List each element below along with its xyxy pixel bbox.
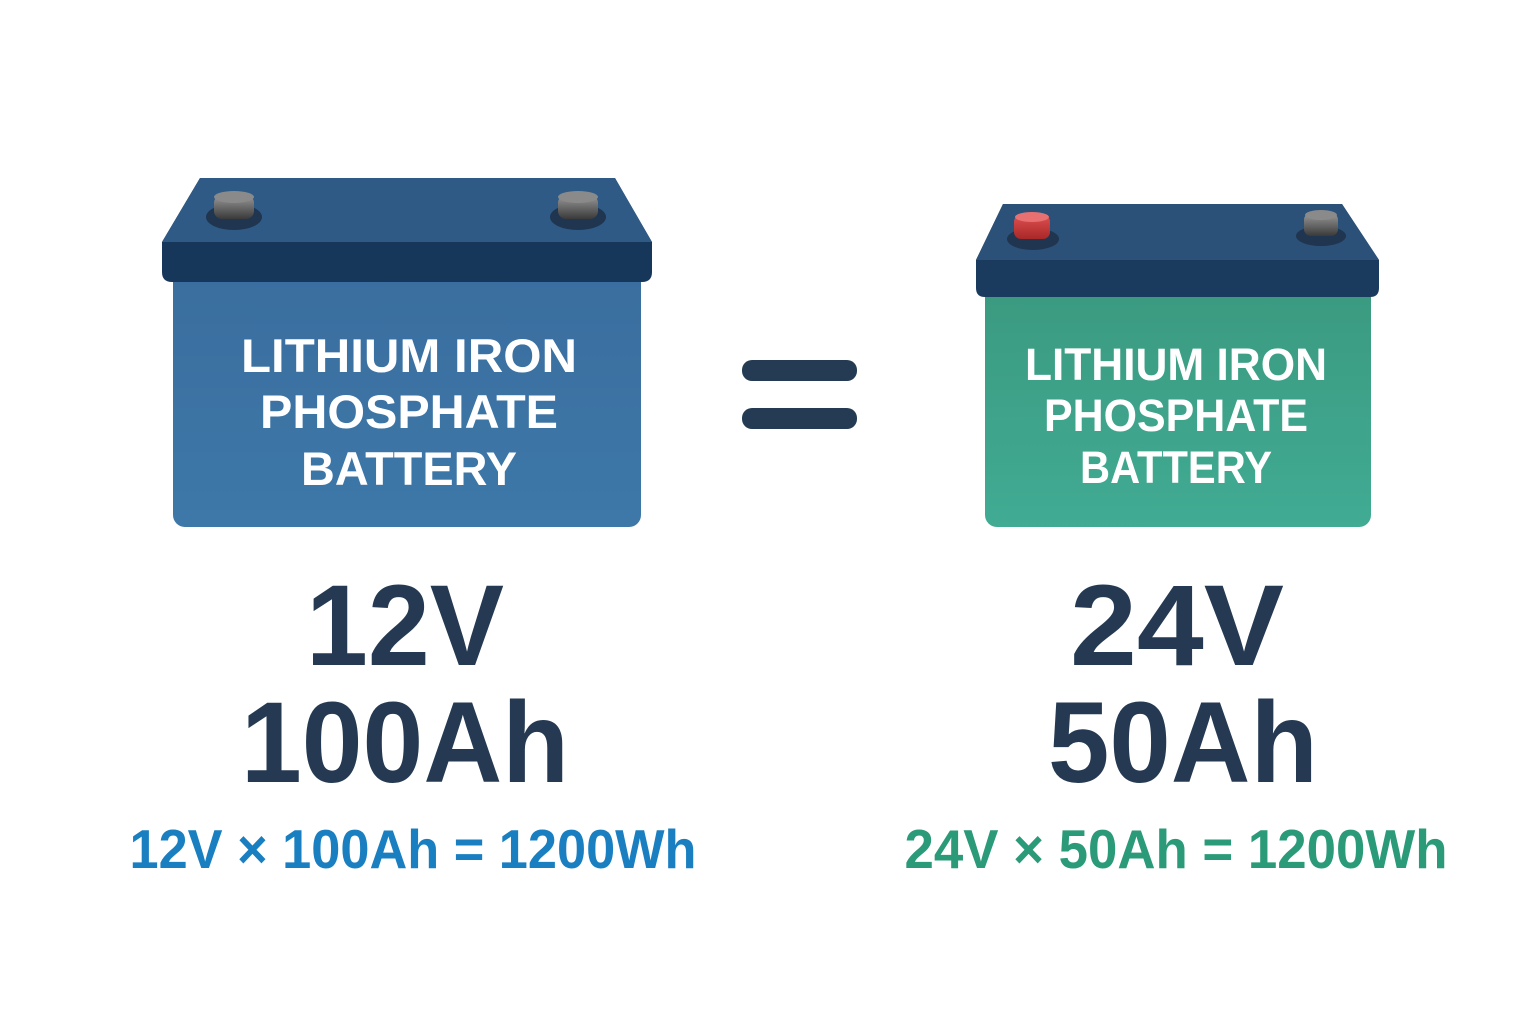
battery: right 24V — [976, 204, 1379, 527]
spec: 24V 50Ah — [1048, 562, 1318, 807]
equals sign — [742, 360, 857, 429]
label: right battery: LITHIUM IRON — [1025, 339, 1327, 390]
label: left battery: LITHIUM IRON — [241, 329, 577, 382]
label: left battery — [241, 329, 577, 495]
spec: 12V 100Ah: 100Ah — [241, 679, 569, 807]
spec: 24V 50Ah: 24V — [1070, 562, 1284, 690]
spec: 12V 100Ah — [241, 562, 569, 807]
label: right battery: BATTERY — [1080, 442, 1272, 493]
label: left battery: BATTERY — [301, 442, 517, 495]
formula: right: 24V × 50Ah = 1200Wh — [904, 818, 1448, 880]
formula: left: 12V × 100Ah = 1200Wh — [130, 818, 696, 880]
spec: 12V 100Ah: 12V — [306, 562, 504, 690]
icon: red terminal — [1007, 212, 1059, 250]
icon: terminal right — [550, 191, 606, 230]
label: right battery — [1025, 339, 1327, 493]
label: right battery: PHOSPHATE — [1044, 390, 1308, 441]
label: left battery: PHOSPHATE — [260, 385, 558, 438]
icon: terminal left — [206, 191, 262, 230]
spec: 24V 50Ah: 50Ah — [1048, 679, 1318, 807]
battery: left 12V — [162, 178, 652, 527]
icon: grey terminal — [1296, 210, 1346, 246]
